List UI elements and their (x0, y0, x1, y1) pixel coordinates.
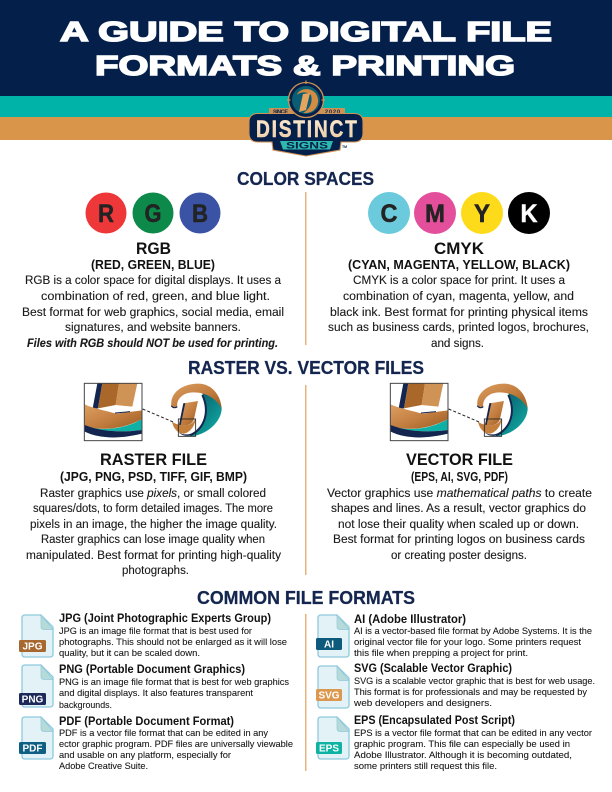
vector heading (406, 450, 513, 484)
icon: EPS file: EPS (319, 744, 339, 755)
logo: Distinct Signs: SIGNS (286, 140, 328, 150)
SVG text: web developers and designers. (353, 697, 492, 708)
PDF text (59, 715, 293, 771)
RGB heading (91, 239, 215, 272)
panel: CMYK (328, 192, 589, 350)
title: A GUIDE TO DIGITAL FILE (60, 16, 552, 47)
icon: SVG file (316, 666, 349, 708)
logo: Distinct Signs: DISTINCT (256, 115, 359, 143)
CMYK colour circles: M (425, 200, 445, 228)
SVG text: This format is for professionals and may be requested by (354, 686, 587, 697)
CMYK description: CMYK is a color space for print. It uses a (353, 273, 565, 287)
vector description (327, 486, 592, 562)
CMYK heading: CMYK (434, 239, 485, 258)
SVG text (353, 662, 595, 708)
vector description: not lose their quality when scaled up or down. (338, 517, 579, 531)
raster heading: (JPG, PNG, PSD, TIFF, GIF, BMP) (60, 470, 247, 484)
CMYK heading (348, 239, 570, 272)
heading: common file formats: COMMON FILE FORMATS (197, 588, 415, 608)
icon: PNG file (19, 665, 53, 707)
vector description: Vector graphics use mathematical paths to create (327, 486, 592, 500)
title: FORMATS & PRINTING (95, 50, 515, 81)
icon: SVG file: SVG (318, 691, 340, 702)
RGB description (22, 273, 284, 350)
RGB description: Best format for web graphics, social media, email (22, 305, 284, 319)
JPG text: JPG is an image file format that is best used for (59, 625, 252, 636)
icon: PDF file (19, 717, 53, 759)
CMYK colour circles: Y (474, 200, 490, 228)
EPS text (354, 714, 592, 771)
CMYK colour circles: C (380, 200, 398, 228)
format: AI (316, 613, 592, 658)
raster heading: RASTER FILE (100, 450, 207, 469)
divider: orange vertical rules (305, 192, 306, 771)
RGB heading: RGB (136, 239, 171, 258)
JPG text: JPG (Joint Photographic Experts Group) (59, 612, 271, 625)
EPS text: Adobe Illustrator. Although it is becoming outdated, (354, 749, 572, 760)
panel: raster file (26, 383, 282, 577)
format: JPG (19, 612, 287, 658)
CMYK colour circles: K (520, 200, 538, 228)
AI text: this file when prepping a project for print. (354, 647, 528, 658)
raster description: pixels in an image, the higher the image quality. (30, 517, 277, 531)
logo: Distinct Signs: SINCE (273, 110, 288, 116)
RGB description: Files with RGB should NOT be used for printing. (27, 336, 278, 350)
raster description: Raster graphics can lose image quality when (41, 532, 265, 546)
AI text: AI is a vector-based file format by Adobe Systems. It is the (354, 625, 592, 636)
vector heading: (EPS, AI, SVG, PDF) (411, 470, 508, 484)
PNG text (59, 663, 289, 710)
header band (0, 0, 612, 140)
AI text (354, 613, 592, 658)
heading: raster vs vector: RASTER VS. VECTOR FILES (188, 358, 424, 378)
RGB colour circles: G (144, 200, 162, 228)
RGB heading: (RED, GREEN, BLUE) (91, 258, 215, 272)
vector heading: VECTOR FILE (406, 450, 513, 469)
vector description: shapes and lines. As a result, vector graphics do (331, 501, 586, 515)
raster description: manipulated. Best format for printing high-quality (26, 548, 282, 562)
RGB description: combination of red, green, and blue light. (41, 289, 270, 303)
PDF text: and usable on any platform, especially for (59, 749, 231, 760)
PDF text: ector graphic program. PDF files are universally viewable (59, 738, 293, 749)
PNG text: PNG is an image file format that is best for web graphics (59, 676, 289, 687)
icon: AI file: AI (324, 640, 334, 651)
icon: EPS file (316, 717, 349, 759)
SVG text: SVG (Scalable Vector Graphic) (354, 662, 512, 675)
title (60, 16, 552, 81)
logo: Distinct Signs: 2020 (325, 110, 340, 116)
EPS text: EPS (Encapsulated Post Script) (354, 714, 515, 727)
vector description: or creating poster designs. (391, 548, 527, 562)
heading: color spaces: COLOR SPACES (237, 169, 374, 189)
CMYK heading: (CYAN, MAGENTA, YELLOW, BLACK) (348, 258, 570, 272)
panel: RGB (22, 192, 284, 350)
CMYK colour circles (368, 192, 550, 234)
PNG text: PNG (Portable Document Graphics) (59, 663, 245, 676)
logo: Distinct Signs: TM (342, 145, 347, 149)
raster description: squares/dots, to form detailed images. The more (33, 501, 273, 515)
SVG text: SVG is a scalable vector graphic that is best for web usage. (354, 675, 595, 686)
icon: JPG file: JPG (22, 642, 43, 653)
AI text: AI (Adobe Illustrator) (354, 613, 466, 626)
raster description: Raster graphics use pixels, or small colored (40, 486, 266, 500)
AI text: original vector file for your logo. Some printers request (354, 636, 581, 647)
raster description: photographs. (122, 563, 189, 577)
JPG text: photographs. This should not be enlarged as it will lose (59, 636, 287, 647)
PNG text: backgrounds. (59, 699, 112, 710)
RGB colour circles (86, 192, 220, 234)
CMYK description: such as business cards, printed logos, brochures, (328, 320, 589, 334)
icon: PDF file: PDF (22, 744, 42, 755)
EPS text: EPS is a vector file format that can be edited in any vector (354, 727, 592, 738)
EPS text: graphic program. This file can especially be used in (354, 738, 570, 749)
format: PNG (19, 663, 289, 710)
raster description (26, 486, 282, 577)
CMYK description: black ink. Best format for printing physical items (330, 305, 588, 319)
RGB description: RGB is a color space for digital displays. It uses a (25, 273, 281, 287)
RGB description: signatures, and website banners. (65, 320, 241, 334)
icon: JPG file (19, 615, 53, 657)
CMYK description (328, 273, 589, 350)
logo: Distinct Signs (249, 80, 363, 156)
vector description: Best format for printing logos on business cards (333, 532, 585, 546)
CMYK description: and signs. (431, 336, 484, 350)
CMYK description: combination of cyan, magenta, yellow, and (343, 289, 574, 303)
JPG text (59, 612, 287, 658)
raster heading (60, 450, 247, 484)
illustration: sharp zoom of logo (390, 383, 528, 441)
icon: PNG file: PNG (22, 695, 44, 706)
illustration: pixelated zoom of logo (84, 383, 222, 441)
format: PDF (19, 715, 293, 771)
panel: vector file (327, 383, 592, 562)
icon: AI file (316, 615, 349, 657)
PDF text: PDF is a vector file format that can be edited in any (59, 727, 268, 738)
PDF text: PDF (Portable Document Format) (59, 715, 234, 728)
PDF text: Adobe Creative Suite. (59, 760, 148, 771)
RGB colour circles: R (98, 200, 114, 228)
format: EPS (316, 714, 592, 771)
format: SVG (316, 662, 595, 708)
JPG text: quality, but it can be scaled down. (59, 647, 200, 658)
RGB colour circles: B (192, 200, 208, 228)
PNG text: and digital displays. It also features transparent (59, 687, 253, 698)
EPS text: some printers still request this file. (354, 760, 497, 771)
